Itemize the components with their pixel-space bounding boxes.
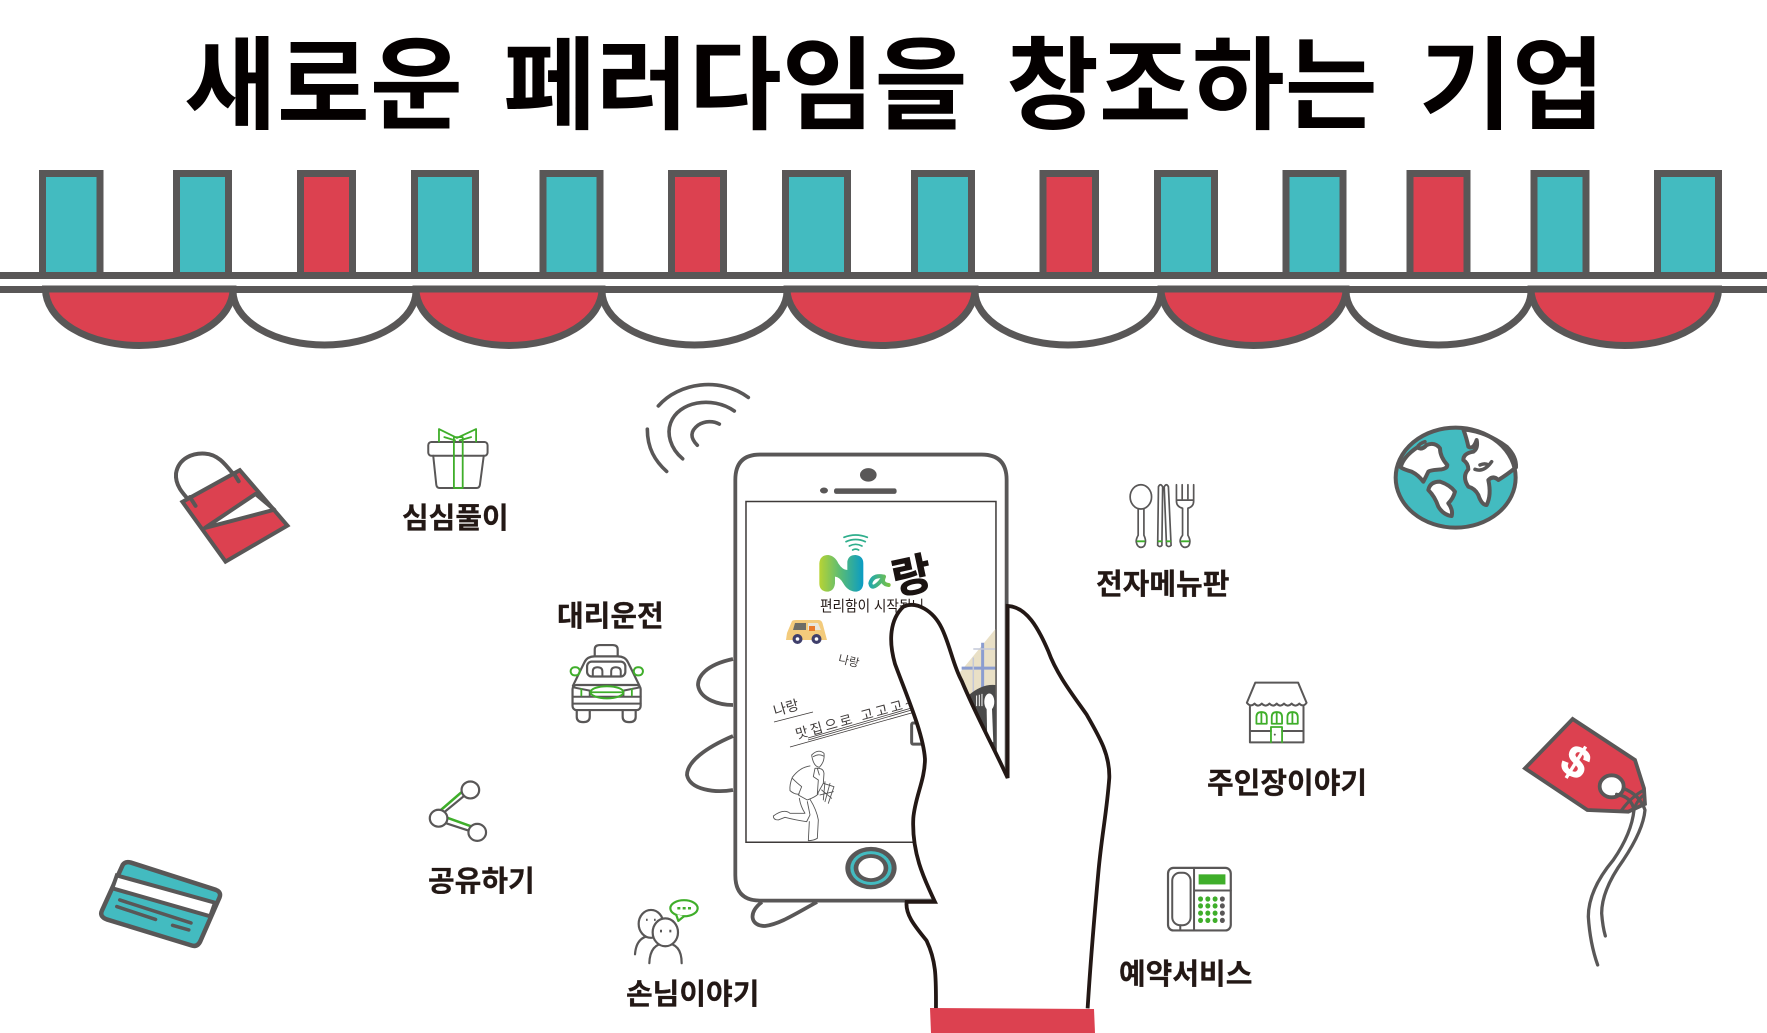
phone body (735, 455, 1007, 901)
awning: rails (0, 272, 1767, 293)
icon: back fingers (687, 659, 817, 926)
icon: globe (1396, 428, 1516, 528)
label: 예약서비스: 예약서비스 (1119, 958, 1252, 991)
app tagline: 편리함이 시작됩니 (820, 598, 924, 615)
label: 주인장이야기: 주인장이야기 (1207, 767, 1367, 800)
icon: wifi signal (647, 385, 748, 471)
small handwriting: 나랑: 나랑 (837, 653, 861, 670)
label: 대리운전: 대리운전 (557, 600, 664, 633)
app logo: 랑 (888, 549, 936, 605)
price tag dollar sign: $ (1552, 735, 1599, 790)
handwriting: 나랑: 나랑 (771, 696, 801, 719)
awning: upper stripes (42, 174, 1718, 276)
icon: price tag (1525, 719, 1645, 965)
hand cuff (930, 1008, 1095, 1033)
phone camera and speaker (820, 468, 897, 494)
icon: desk telephone (1168, 868, 1231, 930)
title: 창조하는 (1006, 31, 1378, 143)
label: 손님이야기: 손님이야기 (626, 978, 759, 1011)
icon: credit card (101, 862, 220, 946)
icon: taxi (571, 645, 643, 722)
label: 심심풀이: 심심풀이 (402, 502, 509, 535)
home button (845, 847, 897, 889)
icon: guests talking (635, 900, 698, 963)
title: 페러다임을 (503, 31, 968, 143)
label: 전자메뉴판: 전자메뉴판 (1096, 568, 1229, 601)
title: 새로운 (184, 31, 463, 143)
awning: red scallops (0, 286, 1767, 346)
app logo (819, 535, 936, 605)
label: 공유하기: 공유하기 (428, 865, 535, 898)
phone (735, 455, 1007, 901)
screen image: plaid and cutlery (912, 629, 995, 748)
sketch: running man (773, 751, 834, 841)
icon: gift box (428, 429, 488, 488)
icon: cutlery (1130, 485, 1194, 547)
phone screen (746, 501, 996, 842)
title: 기업 (1419, 31, 1605, 143)
title (184, 31, 1605, 143)
handwriting: 맛집으로 고고고: 맛집으로 고고고~! (794, 693, 921, 742)
hand (891, 605, 1109, 1008)
icon: store (1247, 683, 1307, 742)
icon: shopping bag (176, 453, 287, 562)
icon: share (430, 781, 486, 841)
icon: mini taxi (786, 620, 827, 644)
awning: white scallops (233, 291, 1531, 345)
